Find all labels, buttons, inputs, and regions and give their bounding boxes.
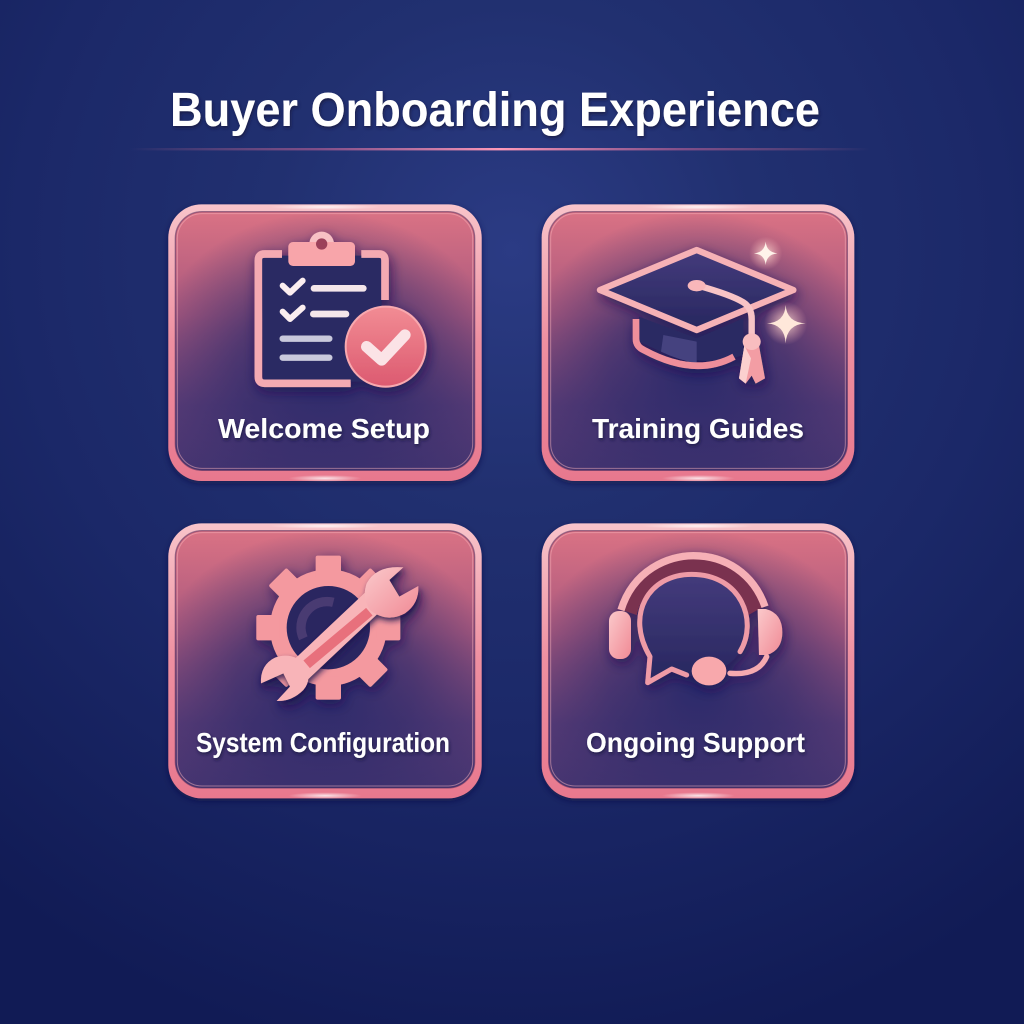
icon: headset with speech bubble — [609, 556, 782, 685]
icon: graduation cap with tassel — [600, 250, 793, 384]
panel: system configuration — [168, 523, 482, 799]
icon: sparkles — [749, 237, 807, 345]
panel: ongoing support — [542, 523, 854, 799]
label: ongoing support: Ongoing Support — [586, 727, 805, 758]
icon: gear and wrench — [256, 556, 418, 701]
panel: training guides — [542, 204, 854, 482]
title: Buyer Onboarding Experience — [170, 84, 820, 137]
label: welcome setup: Welcome Setup — [218, 413, 430, 444]
title underline — [130, 148, 870, 150]
icon: clipboard checklist with check badge — [258, 232, 426, 387]
label: system configuration: System Configuration — [196, 727, 450, 758]
icon: wrench — [261, 567, 418, 701]
label: training guides: Training Guides — [592, 413, 804, 444]
panel: welcome setup — [168, 204, 482, 482]
